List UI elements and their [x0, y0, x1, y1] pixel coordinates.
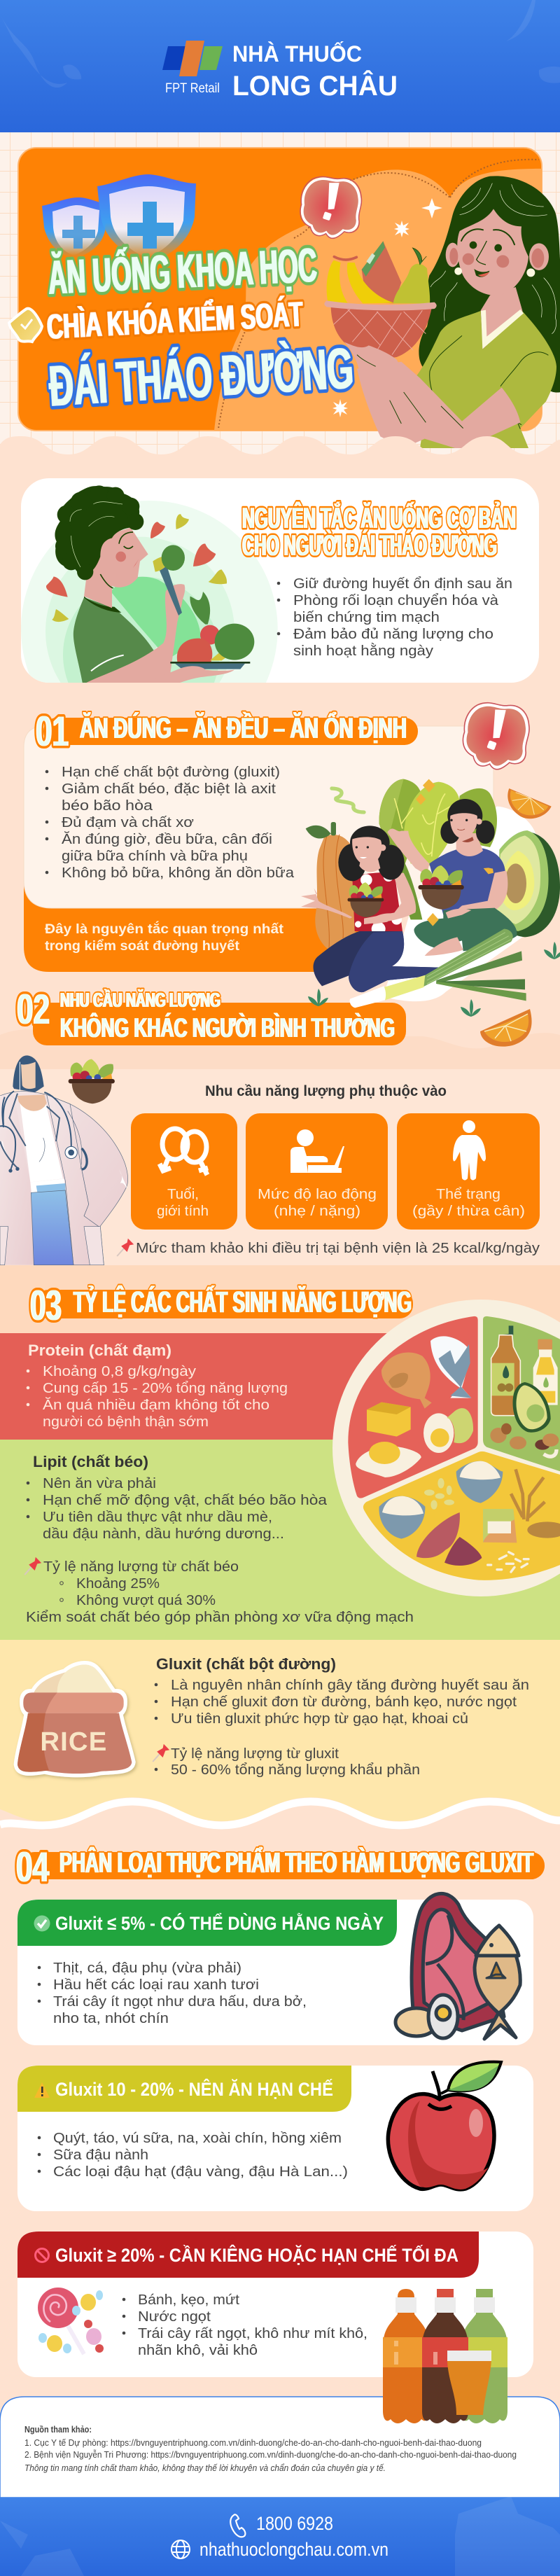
sparkle	[421, 198, 442, 218]
card: low carbohydrate	[18, 1893, 533, 2045]
icon: candy	[38, 2288, 104, 2354]
heading: section 02	[17, 986, 406, 1045]
illustration: woman with fruit basket	[324, 176, 560, 448]
list: goals: sinh hoạt hằng ngày	[293, 643, 434, 659]
list: medium carbohydrate: Quýt, táo, vú sữa, na, xoài chín, hồng xiêm	[53, 2130, 342, 2146]
hero light blob	[214, 169, 546, 431]
band: protein	[0, 1333, 560, 1440]
icon: salad bowl	[69, 1059, 115, 1103]
band: lipid	[0, 1440, 560, 1644]
band: wave behind section 02	[0, 1029, 560, 1069]
list: section 01: Đủ đạm và chất xơ	[62, 814, 194, 830]
avocado	[495, 831, 560, 937]
header band	[0, 0, 560, 132]
icon: small shield	[42, 197, 106, 259]
heading: section 03: 03	[30, 1282, 62, 1329]
chart: food plate	[332, 1300, 560, 1596]
card label: Mức độ lao động	[258, 1186, 377, 1202]
icon: alert badge 2	[458, 698, 533, 774]
pumpkin	[315, 835, 356, 950]
heading: principles	[242, 501, 516, 562]
background: hero grid	[0, 132, 560, 461]
panel: carbohydrate text: Tỷ lệ năng lượng từ gluxit	[171, 1746, 339, 1762]
card header yellow	[18, 2066, 351, 2112]
illustration: two women with salad bowls	[301, 779, 560, 1008]
heading: section 04	[16, 1844, 545, 1891]
card: labor level	[246, 1113, 388, 1230]
list: high carbohydrate: Trái cây rất ngọt, khô như mít khô,	[138, 2325, 368, 2341]
list: goals: biến chứng tim mạch	[293, 609, 440, 625]
panel: protein text: Protein (chất đạm)	[28, 1342, 172, 1359]
panel: lipid text: Lipit (chất béo)	[33, 1453, 148, 1470]
card header red: Gluxit ≥ 20% - CẦN KIÊNG HOẶC HẠN CHẾ TỐI ĐA	[55, 2243, 458, 2266]
icon: large shield	[97, 174, 196, 263]
woman right	[429, 849, 505, 915]
note text line 2: trong kiểm soát đường huyết	[45, 938, 240, 954]
icon: sprig 3	[544, 942, 560, 959]
list: goals: Đảm bảo đủ năng lượng cho	[293, 626, 493, 642]
panel: lipid text: dầu đậu nành, dầu hướng dương...	[43, 1526, 284, 1542]
reference 2: 2. Bệnh viện Nguyễn Tri Phương: https://bvnguyentriphuong.com.vn/dinh-duong/che-do-an-cho-danh-cho-nguoi-benh-dai-thao-duong	[24, 2449, 517, 2460]
band: section 02 panel	[0, 1069, 560, 1265]
panel: lipid text: Khoảng 25%	[76, 1575, 160, 1592]
card label line 2: (nhẹ / nặng)	[274, 1203, 360, 1219]
illustration: meat, fish and eggs	[396, 1893, 520, 2039]
list: low carbohydrate: Trái cây ít ngọt như dưa hấu, dưa bở,	[53, 1993, 307, 2010]
panel: section 01	[24, 726, 493, 908]
panel: lipid text: Không vượt quá 30%	[76, 1592, 216, 1608]
illustration: doctor	[0, 1055, 128, 1265]
panel: lipid text	[24, 1453, 414, 1625]
hero title line 2: CHÌA KHÓA KIỂM SOÁT	[46, 295, 304, 347]
icon: sprig 2	[461, 999, 481, 1017]
panel: carbohydrate text: Gluxit (chất bột đường)	[156, 1655, 336, 1673]
wave divider	[0, 1802, 560, 1825]
card label line 2: giới tính	[157, 1203, 209, 1219]
note text: Đây là nguyên tắc quan trọng nhất	[45, 920, 284, 937]
panel: hero	[9, 148, 560, 448]
heading: section 01	[36, 708, 418, 755]
panel: lipid text: Hạn chế mỡ động vật, chất béo bão hòa	[43, 1492, 328, 1508]
note: reference level: Mức tham khảo khi điều trị tại bệnh viện là 25 kcal/kg/ngày	[136, 1240, 540, 1256]
orange slice	[507, 788, 552, 819]
icon: alert badge	[296, 173, 365, 242]
footer band	[0, 2496, 560, 2576]
panel: basic principles	[21, 478, 539, 683]
leaves	[379, 779, 423, 868]
list: medium carbohydrate: Sữa đậu nành	[53, 2147, 148, 2163]
scalloped section edge	[0, 436, 560, 490]
list: high carbohydrate	[122, 2292, 368, 2358]
woman left	[352, 872, 402, 931]
squiggle	[332, 788, 364, 812]
bowls	[347, 882, 384, 917]
icon: sprig 1	[308, 989, 328, 1006]
list: goals: Phòng rối loạn chuyển hóa và	[293, 592, 499, 608]
logo: FPT bars	[162, 41, 223, 76]
panel: carbohydrate text: 50 - 60% tổng năng lượng khẩu phần	[171, 1762, 420, 1778]
heading: section 02: KHÔNG KHÁC NGƯỜI BÌNH THƯỜNG	[60, 1012, 395, 1043]
panel: carbohydrate text: Là nguyên nhân chính gây tăng đường huyết sau ăn	[171, 1677, 529, 1693]
panel: lipid text: Ưu tiên dầu thực vật như dầu mè,	[43, 1509, 272, 1525]
card: high carbohydrate	[18, 2232, 533, 2377]
list: high carbohydrate: nhãn khô, vải khô	[138, 2342, 258, 2358]
list: section 01: Giảm chất béo, đặc biệt là axit	[62, 781, 276, 797]
icon: yellow check badge	[9, 309, 42, 342]
card: body type	[397, 1113, 540, 1230]
panel: protein text	[27, 1342, 288, 1430]
panel: carbohydrate text: Hạn chế gluxit đơn từ đường, bánh kẹo, nước ngọt	[171, 1694, 517, 1710]
sparkle small	[394, 221, 410, 237]
icon: phone	[230, 2514, 245, 2537]
dotted trail	[218, 160, 539, 429]
list: section 01: Hạn chế chất bột đường (gluxit)	[62, 764, 280, 780]
panel: lipid text: Nên ăn vừa phải	[43, 1475, 156, 1491]
list: section 01: Ăn đúng giờ, đều bữa, cân đối	[62, 831, 272, 847]
heading: section 03	[30, 1282, 413, 1329]
list: low carbohydrate: nho ta, nhót chín	[53, 2010, 169, 2026]
card header yellow: Gluxit 10 - 20% - NÊN ĂN HẠN CHẾ	[55, 2078, 333, 2100]
list: medium carbohydrate: Các loại đậu hạt (đậu vàng, đậu Hà Lan...)	[53, 2164, 348, 2180]
hero title line 3: ĐÁI THÁO ĐƯỜNG	[47, 335, 355, 419]
phone number: 1800 6928	[256, 2513, 333, 2534]
list: high carbohydrate: Bánh, kẹo, mứt	[138, 2292, 239, 2308]
logo: FPT Retail: FPT Retail	[165, 81, 220, 96]
panel: carbohydrate text: Ưu tiên gluxit phức hợp từ gạo hạt, khoai củ	[171, 1711, 468, 1727]
list: medium carbohydrate	[38, 2130, 348, 2180]
plate: fat sector	[483, 1316, 560, 1480]
panel: protein text: người có bệnh thận sớm	[43, 1414, 209, 1430]
band: carbohydrate	[0, 1640, 560, 1821]
panel: orange note	[24, 875, 364, 972]
list: section 01: Không bỏ bữa, không ăn dồn bữa	[62, 865, 295, 881]
illustration: soft drink bottles	[383, 2289, 507, 2423]
fruit	[362, 241, 401, 303]
panel: protein text: Cung cấp 15 - 20% tổng năng lượng	[43, 1380, 288, 1396]
icon: body figure	[453, 1120, 486, 1181]
leek	[436, 951, 522, 984]
website: nhathuoclongchau.com.vn	[200, 2539, 388, 2560]
icon: rice sack: RICE	[40, 1727, 106, 1757]
list: section 01	[46, 764, 295, 881]
card label: Tuổi,	[167, 1186, 199, 1202]
heading: section 01: ĂN ĐÚNG – ĂN ĐỀU – ĂN ỔN ĐỊNH	[80, 710, 407, 744]
plate: carbohydrate sector	[363, 1451, 560, 1580]
illustration: man eating vegetables	[21, 485, 277, 683]
logo: Nhà thuốc: NHÀ THUỐC	[232, 41, 362, 67]
list: goals: Giữ đường huyết ổn định sau ăn	[293, 576, 512, 592]
list: low carbohydrate	[38, 1960, 307, 2026]
icon: rice sack	[18, 1664, 132, 1774]
panel: lipid text: Kiểm soát chất béo góp phần phòng xơ vữa động mạch	[26, 1609, 414, 1625]
panel: carbohydrate text	[153, 1655, 529, 1778]
panel: lipid text: Tỷ lệ năng lượng từ chất béo	[43, 1559, 239, 1575]
list: section 01: béo bão hòa	[62, 798, 153, 814]
card label line 2: (gầy / thừa cân)	[412, 1203, 525, 1219]
card header green: Gluxit ≤ 5% - CÓ THỂ DÙNG HẰNG NGÀY	[55, 1912, 384, 1934]
reference heading: Nguồn tham khảo:	[24, 2425, 92, 2435]
card: medium carbohydrate	[18, 2062, 533, 2211]
list: low carbohydrate: Hầu hết các loại rau xanh tươi	[53, 1977, 259, 1993]
icon: person at laptop	[290, 1129, 344, 1173]
heading: section 01: 01	[36, 708, 69, 755]
subheading: energy needs: Nhu cầu năng lượng phụ thuộc vào	[205, 1083, 447, 1099]
footer decoration	[0, 2496, 560, 2576]
card label: Thể trạng	[436, 1186, 500, 1202]
reference 1: 1. Cục Y tế Dự phòng: https://bvnguyentriphuong.com.vn/dinh-duong/che-do-an-cho-danh-cho-nguoi-benh-dai-thao-duong	[24, 2438, 482, 2448]
panel: references	[0, 2397, 560, 2498]
card header red	[18, 2232, 479, 2278]
list: high carbohydrate: Nước ngọt	[138, 2309, 211, 2325]
icon: gender symbols	[160, 1129, 208, 1175]
logo: Long Châu: LONG CHÂU	[232, 69, 398, 102]
band: section 03 header	[0, 1265, 560, 1333]
list: section 01: giữa bữa chính và bữa phụ	[62, 848, 248, 864]
illustration: apple	[388, 2062, 501, 2189]
disclaimer: Thông tin mang tính chất tham khảo, không thay thế lời khuyên và chẩn đoán của chuyên gia y tế.	[24, 2463, 386, 2473]
plate: protein sector	[348, 1316, 478, 1498]
card header green	[18, 1900, 397, 1946]
heading: section 02: NHU CẦU NĂNG LƯỢNG	[60, 988, 220, 1012]
heading: section 02: 02	[17, 986, 50, 1033]
icon: orange slice	[480, 1009, 532, 1047]
heading: section 04: 04	[16, 1844, 49, 1891]
list: goals	[277, 576, 512, 659]
list: low carbohydrate: Thịt, cá, đậu phụ (vừa phải)	[53, 1960, 241, 1976]
panel: protein text: Khoảng 0,8 g/kg/ngày	[43, 1363, 197, 1379]
panel: protein text: Ăn quá nhiều đạm không tốt cho	[43, 1397, 270, 1413]
hero title line 1: ĂN UỐNG KHOA HỌC	[47, 238, 318, 305]
icon: globe	[172, 2540, 190, 2558]
card: age and sex	[131, 1113, 237, 1230]
sparkle bottom	[332, 399, 348, 417]
